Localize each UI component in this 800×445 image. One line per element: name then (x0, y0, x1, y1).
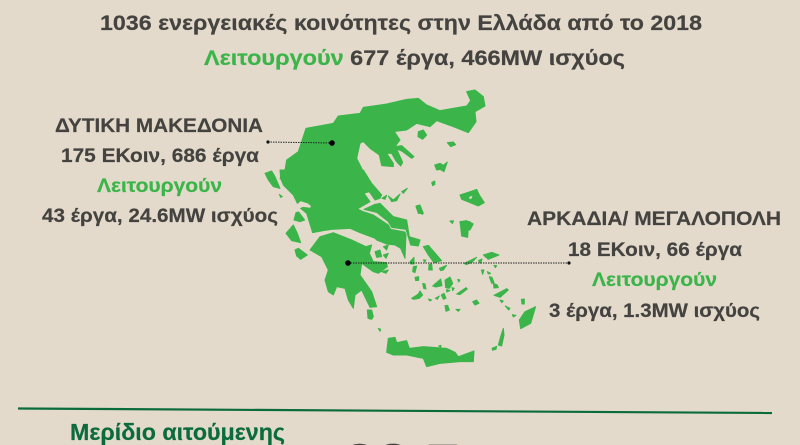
callout: Western Macedonia (42, 116, 278, 227)
callout: Western Macedonia: Λειτουργούν (97, 176, 222, 197)
northern mainland and islands (265, 90, 485, 230)
callout: Western Macedonia: 175 ΕΚοιν, 686 έργα (61, 146, 259, 167)
callout: Arcadia / Megalopoli: Λειτουργούν (592, 270, 717, 291)
callout: Western Macedonia: ΔΥΤΙΚΗ ΜΑΚΕΔΟΝΙΑ (55, 116, 263, 137)
callout: Arcadia / Megalopoli (527, 209, 781, 322)
callout: Arcadia / Megalopoli: ΑΡΚΑΔΙΑ/ ΜΕΓΑΛΟΠΟΛΗ (527, 209, 781, 230)
leader line: Arcadia (345, 260, 571, 266)
Peloponnese and southern islands (295, 221, 536, 367)
callout: Western Macedonia: 43 έργα, 24.6MW ισχύος (42, 206, 278, 227)
callout: Arcadia / Megalopoli: 18 ΕΚοιν, 66 έργα (568, 240, 742, 261)
callout: Arcadia / Megalopoli: 3 έργα, 1.3MW ισχύος (549, 301, 760, 322)
share label: Μερίδιο αιτούμενης (70, 419, 285, 445)
leader line: Western Macedonia (266, 140, 335, 146)
map of Greece (265, 90, 536, 367)
title: 1036 ενεργειακές κοινότητες στην Ελλάδα από το 2018 (100, 12, 702, 35)
divider line (18, 408, 772, 413)
title (100, 12, 702, 70)
Chalkidiki (360, 130, 414, 167)
title: Λειτουργούν 677 έργα, 466MW ισχύος (204, 47, 625, 70)
central Greece and Evia (280, 170, 435, 258)
